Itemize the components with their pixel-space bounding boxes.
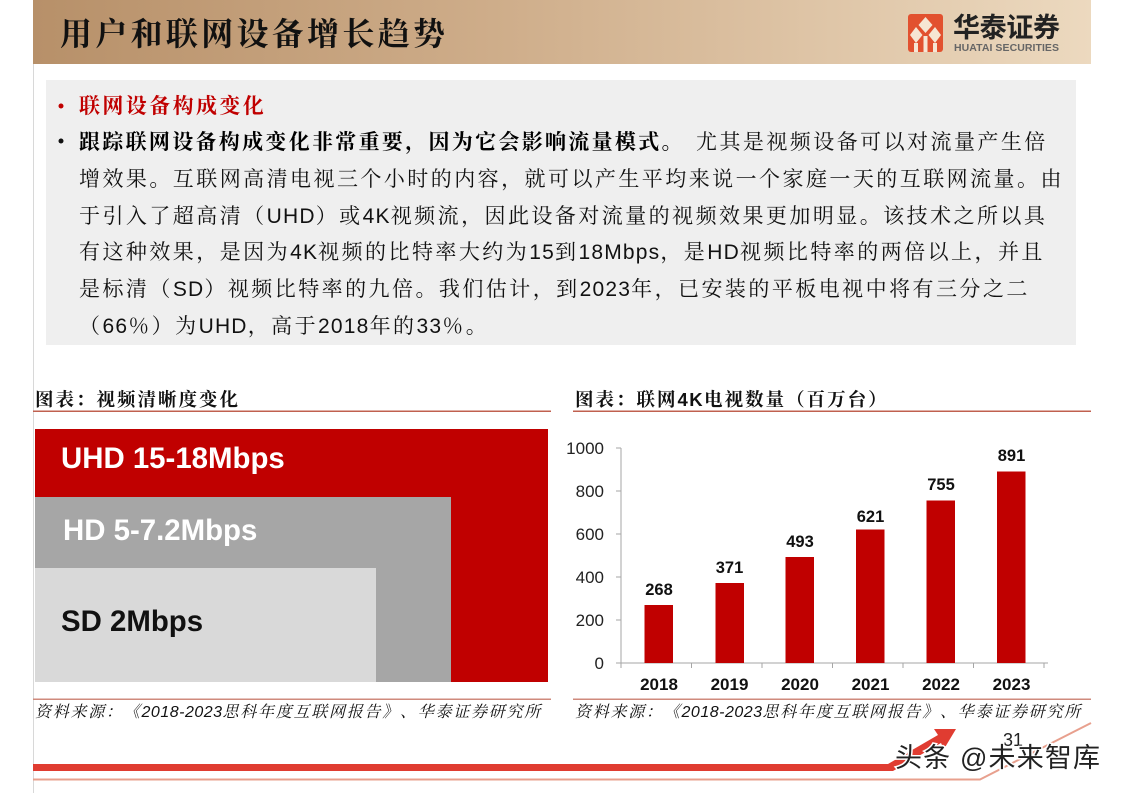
title: 用户和联网设备增长趋势 <box>60 16 448 52</box>
heading: left chart: 图表：视频清晰度变化 <box>35 389 240 410</box>
box: SD: SD 2Mbps <box>61 605 203 638</box>
logo: Huatai Securities <box>908 13 1060 54</box>
heading: right chart: 图表：联网4K电视数量（百万台） <box>575 389 889 410</box>
box: UHD <box>35 429 548 682</box>
bar chart: connected 4K TVs: 2018 <box>640 675 678 694</box>
bar chart: connected 4K TVs: 268 <box>645 581 673 599</box>
body paragraph <box>58 130 1064 339</box>
bar chart: connected 4K TVs: 755 <box>927 476 955 494</box>
logo: Huatai Securities: HUATAI SECURITIES <box>954 42 1059 54</box>
bar chart: connected 4K TVs: 600 <box>576 525 604 544</box>
page number: 31 <box>1003 730 1023 750</box>
box: UHD: UHD 15-18Mbps <box>61 442 285 475</box>
bar chart: connected 4K TVs: 2022 <box>922 675 960 694</box>
bar chart: connected 4K TVs: 2019 <box>711 675 748 694</box>
body paragraph: 尤其是视频设备可以对流量产生倍 <box>696 131 1048 154</box>
body paragraph: 有这种效果，是因为4K视频的比特率大约为15到18Mbps，是HD视频比特率的两倍以上，并且 <box>79 241 1045 265</box>
bar chart: connected 4K TVs: 1000 <box>566 439 604 458</box>
header band <box>33 0 1091 64</box>
body paragraph: 增效果。互联网高清电视三个小时的内容，就可以产生平均来说一个家庭一天的互联网流量。由 <box>79 168 1064 192</box>
watermark: 头条 @未来智库 <box>895 743 1100 773</box>
bar chart: connected 4K TVs <box>566 439 1048 694</box>
bar chart: connected 4K TVs: 621 <box>857 508 884 526</box>
diagram: video resolution nested boxes <box>35 429 548 682</box>
body paragraph: 是标清（SD）视频比特率的九倍。我们估计，到2023年，已安装的平板电视中将有三分之二 <box>79 278 1030 302</box>
bar chart: connected 4K TVs: 200 <box>576 611 604 630</box>
bar chart: connected 4K TVs: 400 <box>576 568 604 587</box>
logo: Huatai Securities: 华泰证券 <box>953 13 1060 43</box>
body paragraph: 跟踪联网设备构成变化非常重要，因为它会影响流量模式。 <box>79 130 685 155</box>
bar chart: connected 4K TVs: 891 <box>998 447 1025 465</box>
box: HD <box>35 497 451 682</box>
bar chart: connected 4K TVs: 2021 <box>852 675 889 694</box>
body paragraph: （66％）为UHD，高于2018年的33％。 <box>79 315 489 339</box>
source note: right: 资料来源：《2018-2023思科年度互联网报告》、华泰证券研究所 <box>575 703 1083 721</box>
bar chart: connected 4K TVs: 0 <box>595 654 604 673</box>
bar chart: connected 4K TVs: 2020 <box>781 675 819 694</box>
footer: rising red arrow <box>33 723 1091 780</box>
bar chart: connected 4K TVs: 2023 <box>993 675 1030 694</box>
bar chart: connected 4K TVs: 371 <box>716 559 743 577</box>
source note: left: 资料来源：《2018-2023思科年度互联网报告》、华泰证券研究所 <box>35 703 543 721</box>
panel: text summary <box>46 80 1076 345</box>
body paragraph: 于引入了超高清（UHD）或4K视频流，因此设备对流量的视频效果更加明显。该技术之所以具 <box>79 205 1047 229</box>
box: HD: HD 5-7.2Mbps <box>63 514 257 547</box>
bar chart: connected 4K TVs: 800 <box>576 482 604 501</box>
red heading: 联网设备构成变化 <box>79 94 266 118</box>
box: SD <box>35 568 376 682</box>
bar chart: connected 4K TVs: 493 <box>786 533 814 551</box>
